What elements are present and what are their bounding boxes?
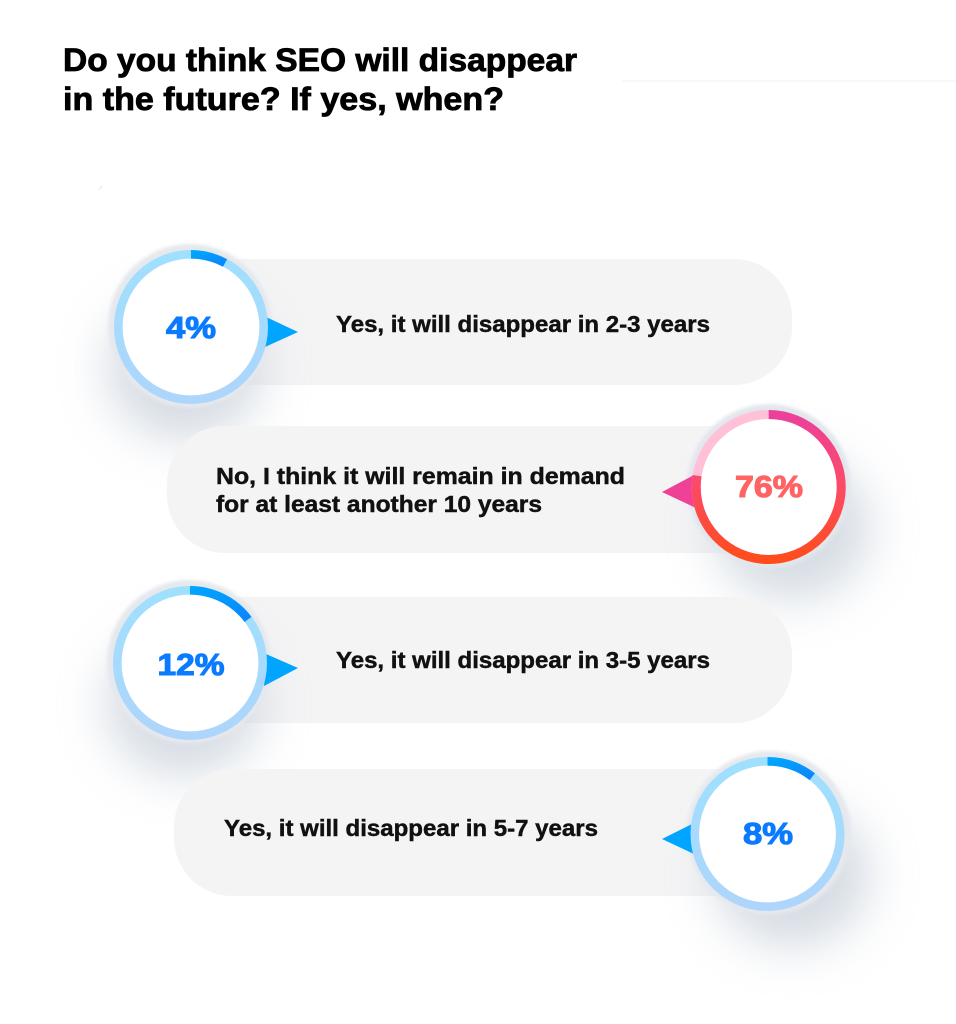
title xyxy=(63,42,577,117)
pill: row 3 xyxy=(185,597,792,723)
pill: row 1: Yes, it will disappear in 2-3 years xyxy=(336,311,710,337)
row 2: 76% no xyxy=(167,404,870,600)
title: in the future? If yes, when? xyxy=(63,81,504,117)
pill: row 3: Yes, it will disappear in 3-5 years xyxy=(336,647,710,673)
donut: 76% xyxy=(662,404,870,600)
row 3: 12% yes in 3-5 years xyxy=(106,580,792,776)
title: Do you think SEO will disappear xyxy=(63,42,577,78)
donut: 8%: 8% xyxy=(743,816,793,851)
pill: row 4: Yes, it will disappear in 5-7 years xyxy=(224,815,598,841)
donut: 12% xyxy=(106,580,298,776)
row 4: 8% yes in 5-7 years xyxy=(174,751,870,947)
pill: row 2: No, I think it will remain in demand xyxy=(216,463,625,489)
donut: 76%: 76% xyxy=(735,469,803,504)
pill: row 4 xyxy=(174,769,774,896)
pill: row 2: for at least another 10 years xyxy=(216,491,542,517)
donut: 4%: 4% xyxy=(166,310,216,345)
donut: 8% xyxy=(662,751,870,947)
donut: 12%: 12% xyxy=(158,647,224,682)
pill: row 2 xyxy=(167,426,774,553)
donut: 4% xyxy=(107,244,298,440)
row 1: 4% yes in 2-3 years xyxy=(107,244,792,440)
pill: row 1 xyxy=(185,259,792,385)
